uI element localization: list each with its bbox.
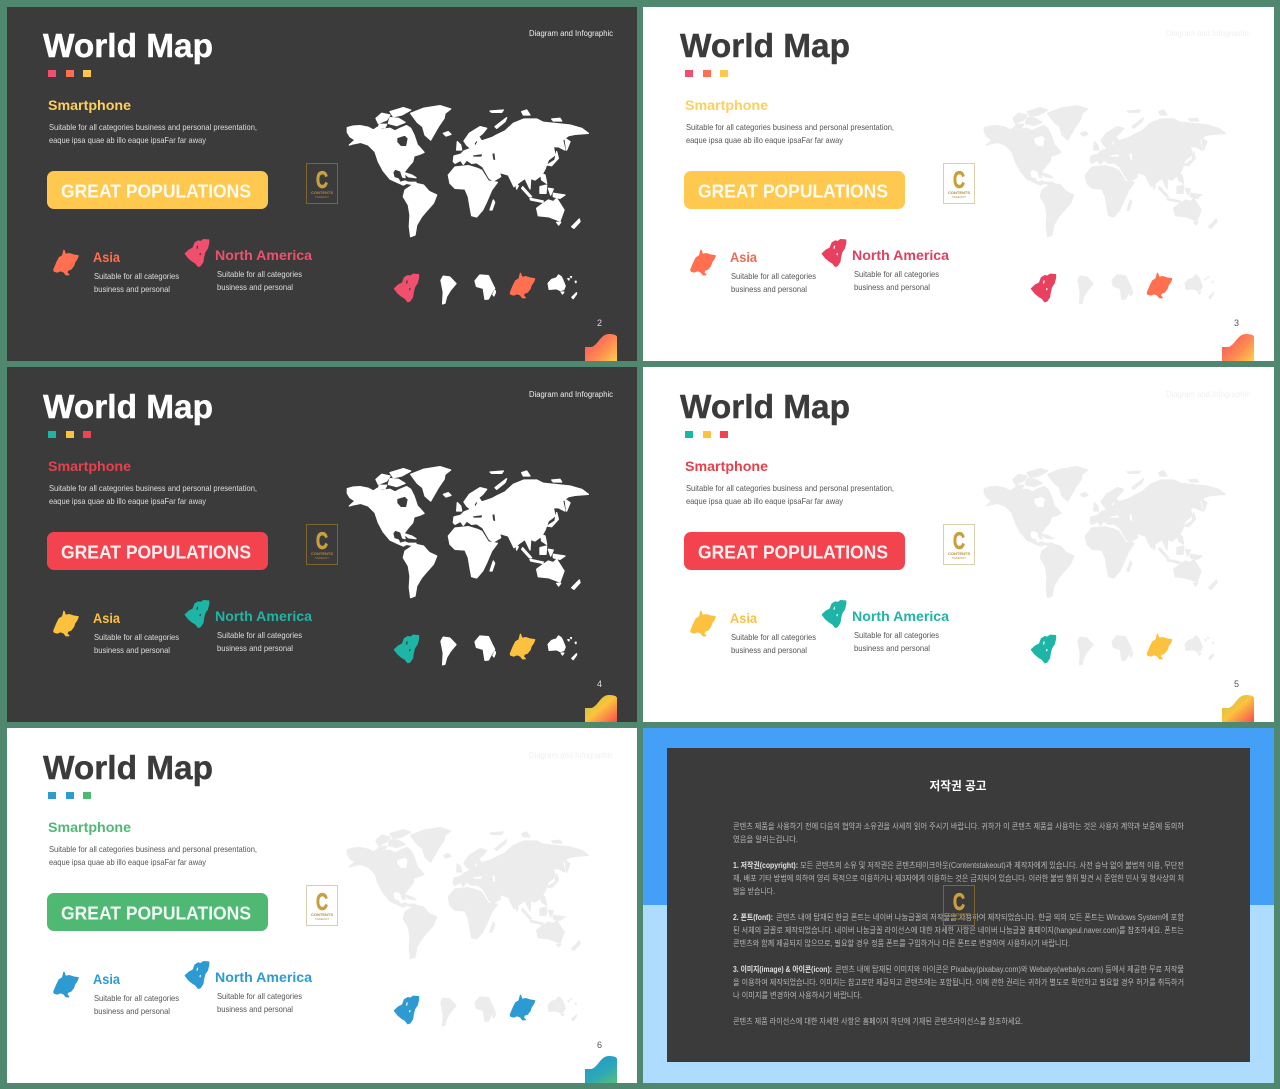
logo: TAKEOUT [952,196,967,199]
continent icons [394,634,576,665]
title: World Map [43,388,213,425]
legend: North America [822,240,949,292]
colour squares [48,431,91,438]
panel: slide 3 light (red yellow) [643,7,1274,361]
subheading: Smartphone [685,458,768,474]
logo: CONTENTS [311,551,333,556]
legend: North America: North America [852,247,949,263]
logo: C [953,167,965,194]
logo: CONTENTS [948,190,970,195]
title: World Map [43,27,213,64]
notice body: 2. 폰트(font): [733,913,773,922]
world map [347,467,588,598]
header label: Diagram and Infographic [529,751,613,760]
legend: North America: North America [215,969,312,985]
legend: North America: Suitable for all categories [854,269,939,279]
notice body: 콘텐츠 내에 탑재된 한글 폰트는 네이버 나눔글꼴의 저작물을 사용하여 제작되었습니다. 한글 외의 모든 폰트는 Windows System에 포함 [776,912,1185,922]
description: eaque ipsa quae ab illo eaque ipsaFar far away [49,496,207,506]
logo: CONTENTS [311,912,333,917]
legend: Asia: Suitable for all categories [94,271,179,281]
world map [984,467,1225,598]
page number: 6 [597,1040,602,1050]
subheading: Smartphone [48,97,131,113]
legend: North America: business and personal [854,643,930,653]
notice body [733,821,1185,1026]
page number: 3 [1234,318,1239,328]
legend: Asia: Asia [93,249,120,265]
colour squares [685,70,728,77]
header label: Diagram and Infographic [529,390,613,399]
legend: North America: North America [215,247,312,263]
world map [347,828,588,959]
button: GREAT POPULATIONS [61,902,251,924]
legend: Asia: Asia [730,249,757,265]
logo: TAKEOUT [315,196,330,199]
notice body: 콘텐츠 제품 라이선스에 대한 자세한 사항은 홈페이지 하단에 기재된 콘텐츠라이선스를 참조하세요. [733,1016,1023,1026]
corner shape [585,1056,617,1083]
panel: copyright notice slide [643,728,1274,1083]
notice body: 3. 이미지(image) & 아이콘(icon): [733,964,832,974]
button: GREAT POPULATIONS [61,180,251,202]
description [49,483,257,506]
notice body: 콘텐츠 내에 탑재된 이미지와 아이콘은 Pixabay(pixabay.com)와 Webalys(webalys.com) 등에서 제공한 무료 저작물 [835,964,1184,974]
continent icons [394,995,576,1026]
legend: North America: business and personal [217,282,293,292]
button [47,171,268,209]
corner shape [585,695,617,722]
legend: North America [185,601,312,653]
legend: Asia [54,249,179,294]
logo: C [316,889,328,916]
legend: Asia: business and personal [731,645,807,655]
legend: Asia: business and personal [94,645,170,655]
legend: Asia: business and personal [94,284,170,294]
legend: North America: Suitable for all categories [854,630,939,640]
legend: Asia [54,610,179,655]
panel: slide 4 dark (teal red) [7,367,637,722]
continent icons [1032,273,1214,304]
title: World Map [43,749,213,786]
logo watermark: C [953,889,965,916]
description [686,483,894,506]
logo: C [953,528,965,555]
logo: CONTENTS [948,551,970,556]
button: GREAT POPULATIONS [698,180,888,202]
subheading: Smartphone [48,458,131,474]
corner shape [1222,334,1254,361]
logo: C [316,167,328,194]
colour squares [48,70,91,77]
notice body: 였음을 알리는겁니다. [733,834,798,844]
notice body: 모든 콘텐츠의 소유 및 저작권은 콘텐츠테이크아웃(Contentstakeout)과 제작자에게 있습니다. 사전 승낙 없이 불법적 이용, 무단전 [800,860,1184,870]
header label: Diagram and Infographic [1166,29,1250,38]
legend: Asia: Suitable for all categories [94,993,179,1003]
button [684,171,905,209]
button [47,893,268,931]
legend: North America: Suitable for all categories [217,630,302,640]
subheading: Smartphone [48,819,131,835]
logo [306,524,338,564]
legend: Asia: business and personal [731,284,807,294]
notice body: 을 이용하여 제작되었습니다. 이미지는 참고로만 제공되고 콘텐츠에는 포함됩니다. 이에 관한 권리는 귀하가 별도로 확인하고 필요할 경우 허가를 취득하거 [733,977,1184,987]
legend: North America: business and personal [854,282,930,292]
logo [306,164,338,204]
legend: Asia: business and personal [94,1006,170,1016]
legend: Asia: Asia [93,610,120,626]
legend: North America: North America [852,608,949,624]
logo: TAKEOUT [315,918,330,921]
description: Suitable for all categories business and personal presentation, [686,122,894,132]
legend: Asia: Suitable for all categories [731,271,816,281]
page number: 2 [597,318,602,328]
legend: North America [822,601,949,653]
button: GREAT POPULATIONS [61,542,251,562]
description [49,844,257,867]
logo watermark [944,886,974,926]
description: eaque ipsa quae ab illo eaque ipsaFar far away [49,857,207,867]
world map [347,106,588,237]
legend: North America: Suitable for all categories [217,269,302,279]
button [47,532,268,570]
header label: Diagram and Infographic [529,29,613,38]
notice body: 된 서체의 글꼴로 제작되었습니다. 네이버 나눔글꼴 라이선스에 대한 자세한 사항은 네이버 나눔글꼴 홈페이지(hangeul.naver.com)를 참조하세요. 폰트는 [733,925,1184,935]
logo watermark: CONTENTS [948,912,970,917]
page number: 5 [1234,679,1239,689]
legend: Asia: Suitable for all categories [94,632,179,642]
description: Suitable for all categories business and personal presentation, [49,483,257,493]
header label: Diagram and Infographic [1166,390,1250,399]
title: World Map [680,388,850,425]
logo watermark: TAKEOUT [952,918,967,921]
legend: Asia: Asia [93,971,120,987]
description [686,122,894,145]
logo [306,886,338,926]
world map [984,106,1225,237]
notice body: 콘텐츠 제품을 사용하기 전에 다음의 협약과 소유권을 사세히 읽어 주시기 바랍니다. 귀하가 이 콘텐츠 제품을 사용하는 것은 사용자 계약과 보증에 동의하 [733,821,1185,831]
legend: Asia: Asia [730,610,757,626]
logo: TAKEOUT [952,557,967,560]
legend: Asia [54,971,179,1016]
description: Suitable for all categories business and personal presentation, [49,844,257,854]
colour squares [685,431,728,438]
notice body: 나 이미지를 변경하여 사용하시기 바랍니다. [733,990,862,1000]
legend: Asia: Suitable for all categories [731,632,816,642]
logo [944,524,974,564]
corner shape [585,334,617,361]
legend: North America [185,240,312,292]
legend: Asia [691,249,816,294]
notice heading: 저작권 공고 [930,778,986,793]
legend: Asia [691,610,816,655]
title: World Map [680,27,850,64]
logo: TAKEOUT [315,557,330,560]
description: eaque ipsa quae ab illo eaque ipsaFar far away [686,496,844,506]
description: eaque ipsa quae ab illo eaque ipsaFar far away [49,135,207,145]
logo [944,164,974,204]
continent icons [394,273,576,304]
logo: CONTENTS [311,190,333,195]
panel: slide 5 light (teal red) [643,367,1274,722]
page number: 4 [597,679,602,689]
logo: C [316,528,328,555]
legend: North America: Suitable for all categories [217,991,302,1001]
legend: North America: North America [215,608,312,624]
description: Suitable for all categories business and personal presentation, [49,122,257,132]
legend: North America [185,962,312,1014]
button: GREAT POPULATIONS [698,542,888,562]
colour squares [48,792,91,799]
legend: North America: business and personal [217,643,293,653]
legend: North America: business and personal [217,1004,293,1014]
continent icons [1032,634,1214,665]
notice body: 1. 저작권(copyright): [733,860,798,870]
notice body: 콘텐츠와 함께 제공되지 않으므로, 필요할 경우 정품 폰트를 구입하거나 다른 폰트로 변경하여 사용하시기 바랍니다. [733,938,1070,948]
notice body: 재, 배포 기타 방법에 의하여 영리 목적으로 이용하거나 제3자에게 이용하는 것은 금지되어 있습니다. 이러한 불법 행위 발견 시 준엄한 민사 및 형사상의 처 [733,873,1184,883]
panel: slide 2 dark (red yellow) [7,7,637,361]
button [684,532,905,570]
corner shape [1222,695,1254,722]
description [49,122,257,145]
panel: slide 6 light (blue green) [7,728,637,1083]
subheading: Smartphone [685,97,768,113]
notice body: 벌을 받습니다. [733,886,775,896]
description: eaque ipsa quae ab illo eaque ipsaFar far away [686,135,844,145]
description: Suitable for all categories business and personal presentation, [686,483,894,493]
